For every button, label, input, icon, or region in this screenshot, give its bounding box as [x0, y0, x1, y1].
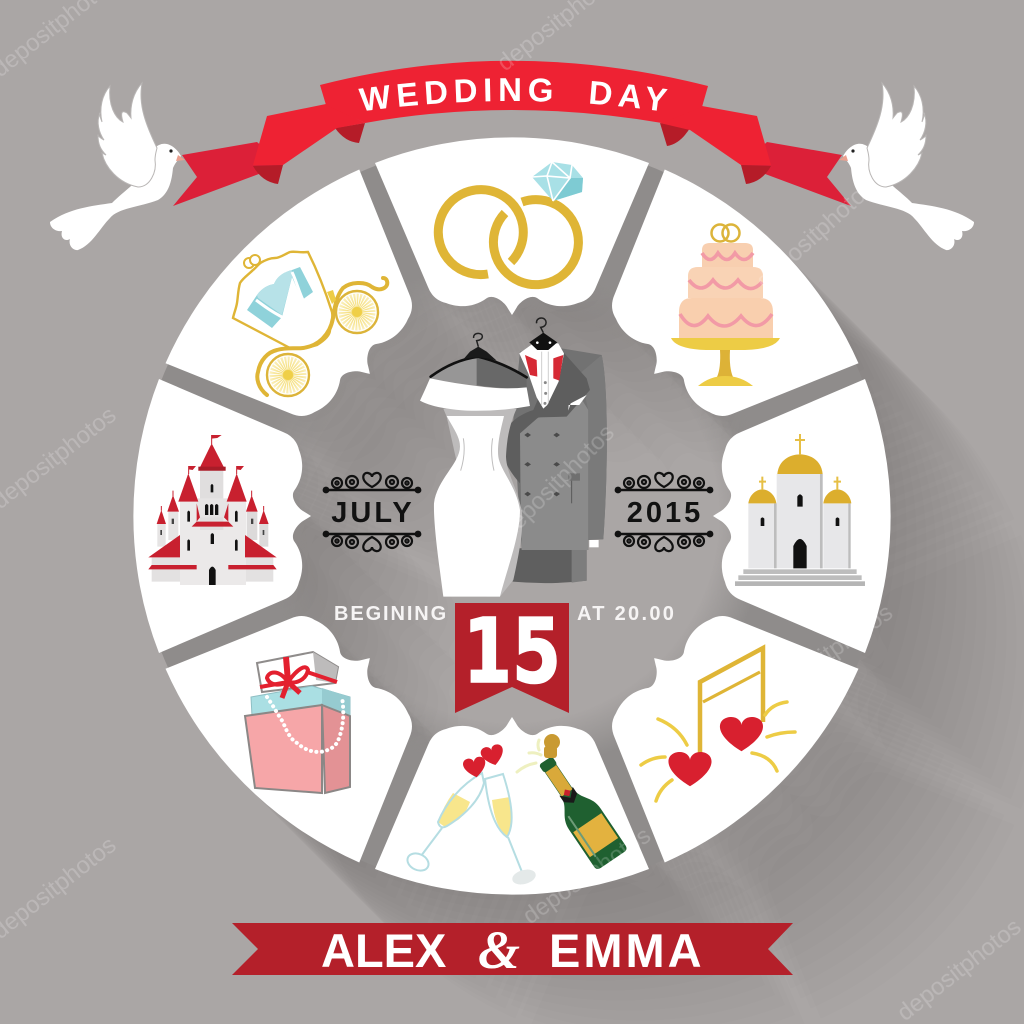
- bottom name ribbon: &: [478, 920, 520, 980]
- dress body: [434, 416, 520, 597]
- icon: gold rings: [438, 162, 583, 285]
- main ribbon band: [320, 61, 708, 123]
- ornament and date: July: JULY: [331, 497, 415, 529]
- icon: diamond: [532, 162, 583, 201]
- collar: [420, 378, 530, 411]
- ornament and date: July: [323, 473, 421, 551]
- icon: left dove: [50, 83, 185, 250]
- watermarks: depositphotos: [751, 174, 880, 294]
- lapel: [501, 348, 590, 483]
- bow tie: [529, 333, 557, 350]
- bottom name ribbon: EMMA: [549, 924, 705, 977]
- hook: [537, 318, 546, 333]
- sleeve: [580, 355, 607, 539]
- ornament and date: 2015: [615, 473, 713, 551]
- shirt: [519, 343, 564, 409]
- day banner: 15: [463, 599, 561, 703]
- suit on hanger: [501, 318, 607, 583]
- jacket front: [520, 397, 588, 550]
- text: time: AT 20.00: [577, 603, 676, 625]
- hanger: [431, 357, 527, 377]
- jacket back and sleeve: [513, 348, 607, 550]
- icon: right dove: [839, 83, 974, 250]
- ribbon folds: [253, 123, 771, 184]
- icon: church: [735, 434, 865, 586]
- neck interior: [430, 357, 477, 385]
- panel: wedding cake: [557, 151, 877, 471]
- top ribbon: [162, 60, 851, 245]
- panel: champagne: [375, 717, 649, 895]
- icon: music note with hearts: [641, 648, 795, 801]
- panel: gifts: [147, 561, 467, 881]
- panel: carriage: [147, 151, 467, 471]
- gaps between panels: [136, 140, 888, 892]
- panel: music note: [557, 561, 877, 881]
- ornament and date: 2015: 2015: [627, 497, 703, 529]
- panel: castle: [133, 379, 311, 653]
- icon: hearts: [462, 743, 506, 779]
- bottom name ribbon: ALEX: [321, 924, 446, 977]
- icon: castle: [148, 435, 277, 585]
- icon: carriage: [233, 252, 387, 396]
- watermarks: depositphotos: [518, 822, 656, 930]
- bottom name ribbon: [232, 920, 793, 980]
- left ribbon tail: [173, 142, 283, 206]
- shirt cuff: [589, 540, 599, 547]
- ribbon side bands: [253, 104, 365, 165]
- panel: church: [713, 379, 891, 653]
- icon: cake: [671, 224, 780, 386]
- icon: champagne glasses: [405, 773, 537, 887]
- pocket square: [568, 395, 587, 411]
- icon: champagne bottle: [517, 734, 628, 871]
- wedding dress on hanger: [420, 333, 530, 597]
- watermarks: depositphotos: [495, 419, 620, 544]
- dress shading: [443, 409, 522, 597]
- text: beginning: BEGINING: [334, 603, 448, 625]
- trousers: [513, 548, 587, 583]
- ribbon title: WEDDING DAY: [358, 78, 668, 111]
- right ribbon tail: [741, 142, 851, 206]
- long flat shadow: [139, 143, 1024, 1024]
- icon: gifts and shopping bag: [245, 652, 350, 793]
- panel: wedding rings: [375, 137, 649, 315]
- watermarks: depositphotos: [760, 599, 898, 707]
